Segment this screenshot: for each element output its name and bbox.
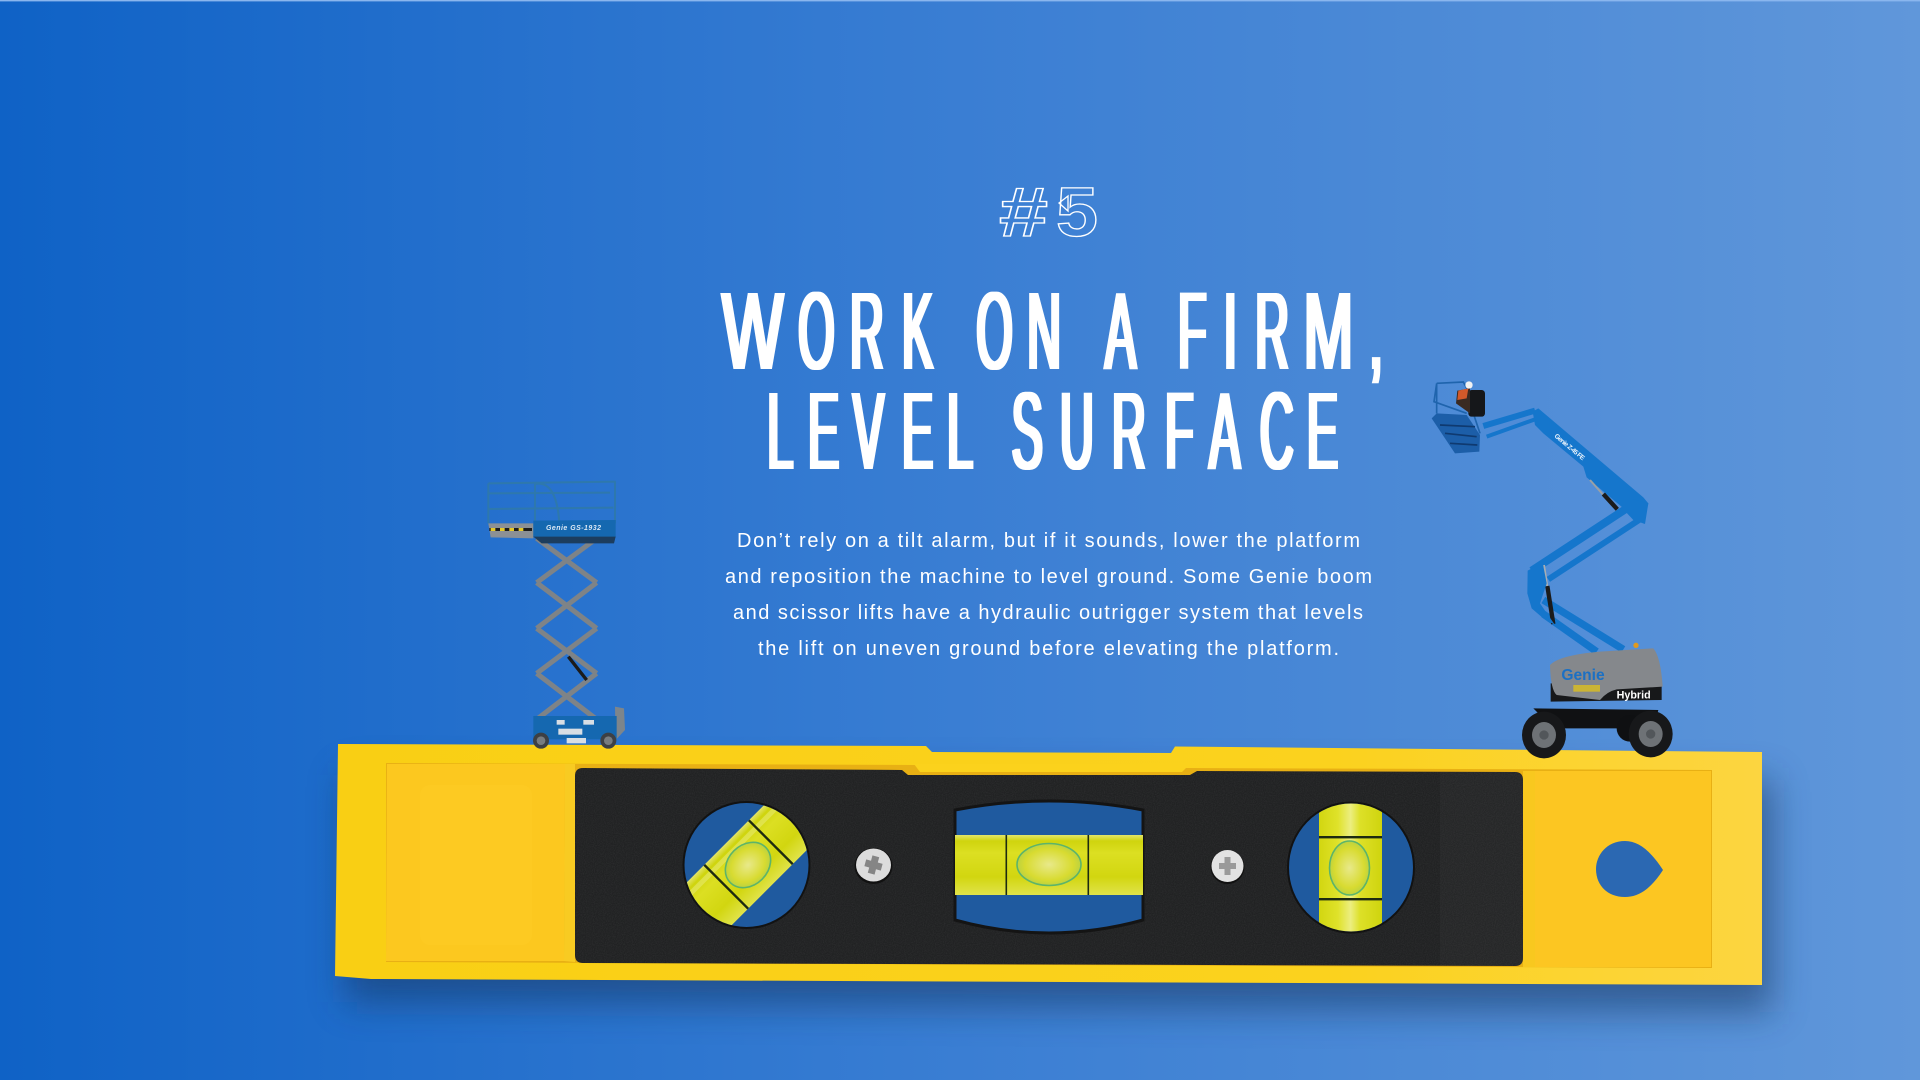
mid boom arms: [1532, 507, 1640, 579]
title: W: [722, 269, 783, 392]
body text: [725, 530, 1372, 660]
scissor lift platform rails: [488, 482, 616, 523]
scissor lift: [488, 482, 625, 749]
left screw: [854, 848, 892, 884]
section number: [999, 173, 1098, 251]
level drop shadow: [345, 775, 1772, 1012]
beacon: [1633, 643, 1639, 648]
turret: Genie: [1561, 667, 1605, 684]
lower joint: [1527, 563, 1555, 625]
title: [722, 269, 1383, 492]
boom lift: [1432, 381, 1673, 758]
body text: the lift on uneven ground before elevating the platform.: [758, 638, 1339, 660]
section number: 5: [1056, 173, 1098, 251]
body text: Don’t rely on a tilt alarm, but if it sounds, lower the platform: [737, 530, 1360, 552]
platform deck: [488, 520, 616, 543]
platform deck: Genie GS-1932: [546, 525, 601, 532]
left recess: [386, 764, 575, 962]
centre tab: [914, 764, 1190, 772]
right vial window: [1287, 800, 1415, 936]
jib arm: [1483, 411, 1535, 437]
boom cylinders: [1544, 480, 1617, 624]
title: M: [1304, 269, 1353, 392]
lift cylinder: [568, 657, 587, 680]
right recess with hang hole: [1523, 771, 1711, 967]
scissor base: [533, 707, 625, 749]
centre vial window: [950, 801, 1148, 933]
title: LEVEL SURFACE: [767, 369, 1338, 492]
scissor arms: [537, 538, 597, 719]
wheels: [1522, 711, 1673, 758]
right screw: [1210, 850, 1244, 884]
title: ,: [1370, 269, 1383, 392]
level yellow body: [335, 744, 1762, 985]
chassis: [1533, 708, 1658, 728]
turret: [1550, 648, 1663, 702]
boom model label: Genie Z-45 FE: [1553, 433, 1586, 463]
black face plate: [575, 768, 1523, 966]
turret: Hybrid: [1617, 689, 1651, 701]
spirit level tool: [335, 744, 1772, 1012]
body text: and reposition the machine to level ground. Some Genie boom: [725, 566, 1372, 588]
basket operator: [1456, 381, 1485, 417]
upper boom: [1533, 408, 1648, 523]
basket: [1432, 382, 1480, 453]
boom mid joint: [1624, 499, 1648, 524]
title: ORK ON A FIR: [798, 269, 1289, 392]
left vial window: [682, 801, 810, 929]
section number: #: [999, 173, 1048, 251]
lower boom arms: [1543, 600, 1623, 652]
body text: and scissor lifts have a hydraulic outrigger system that levels: [733, 602, 1363, 624]
